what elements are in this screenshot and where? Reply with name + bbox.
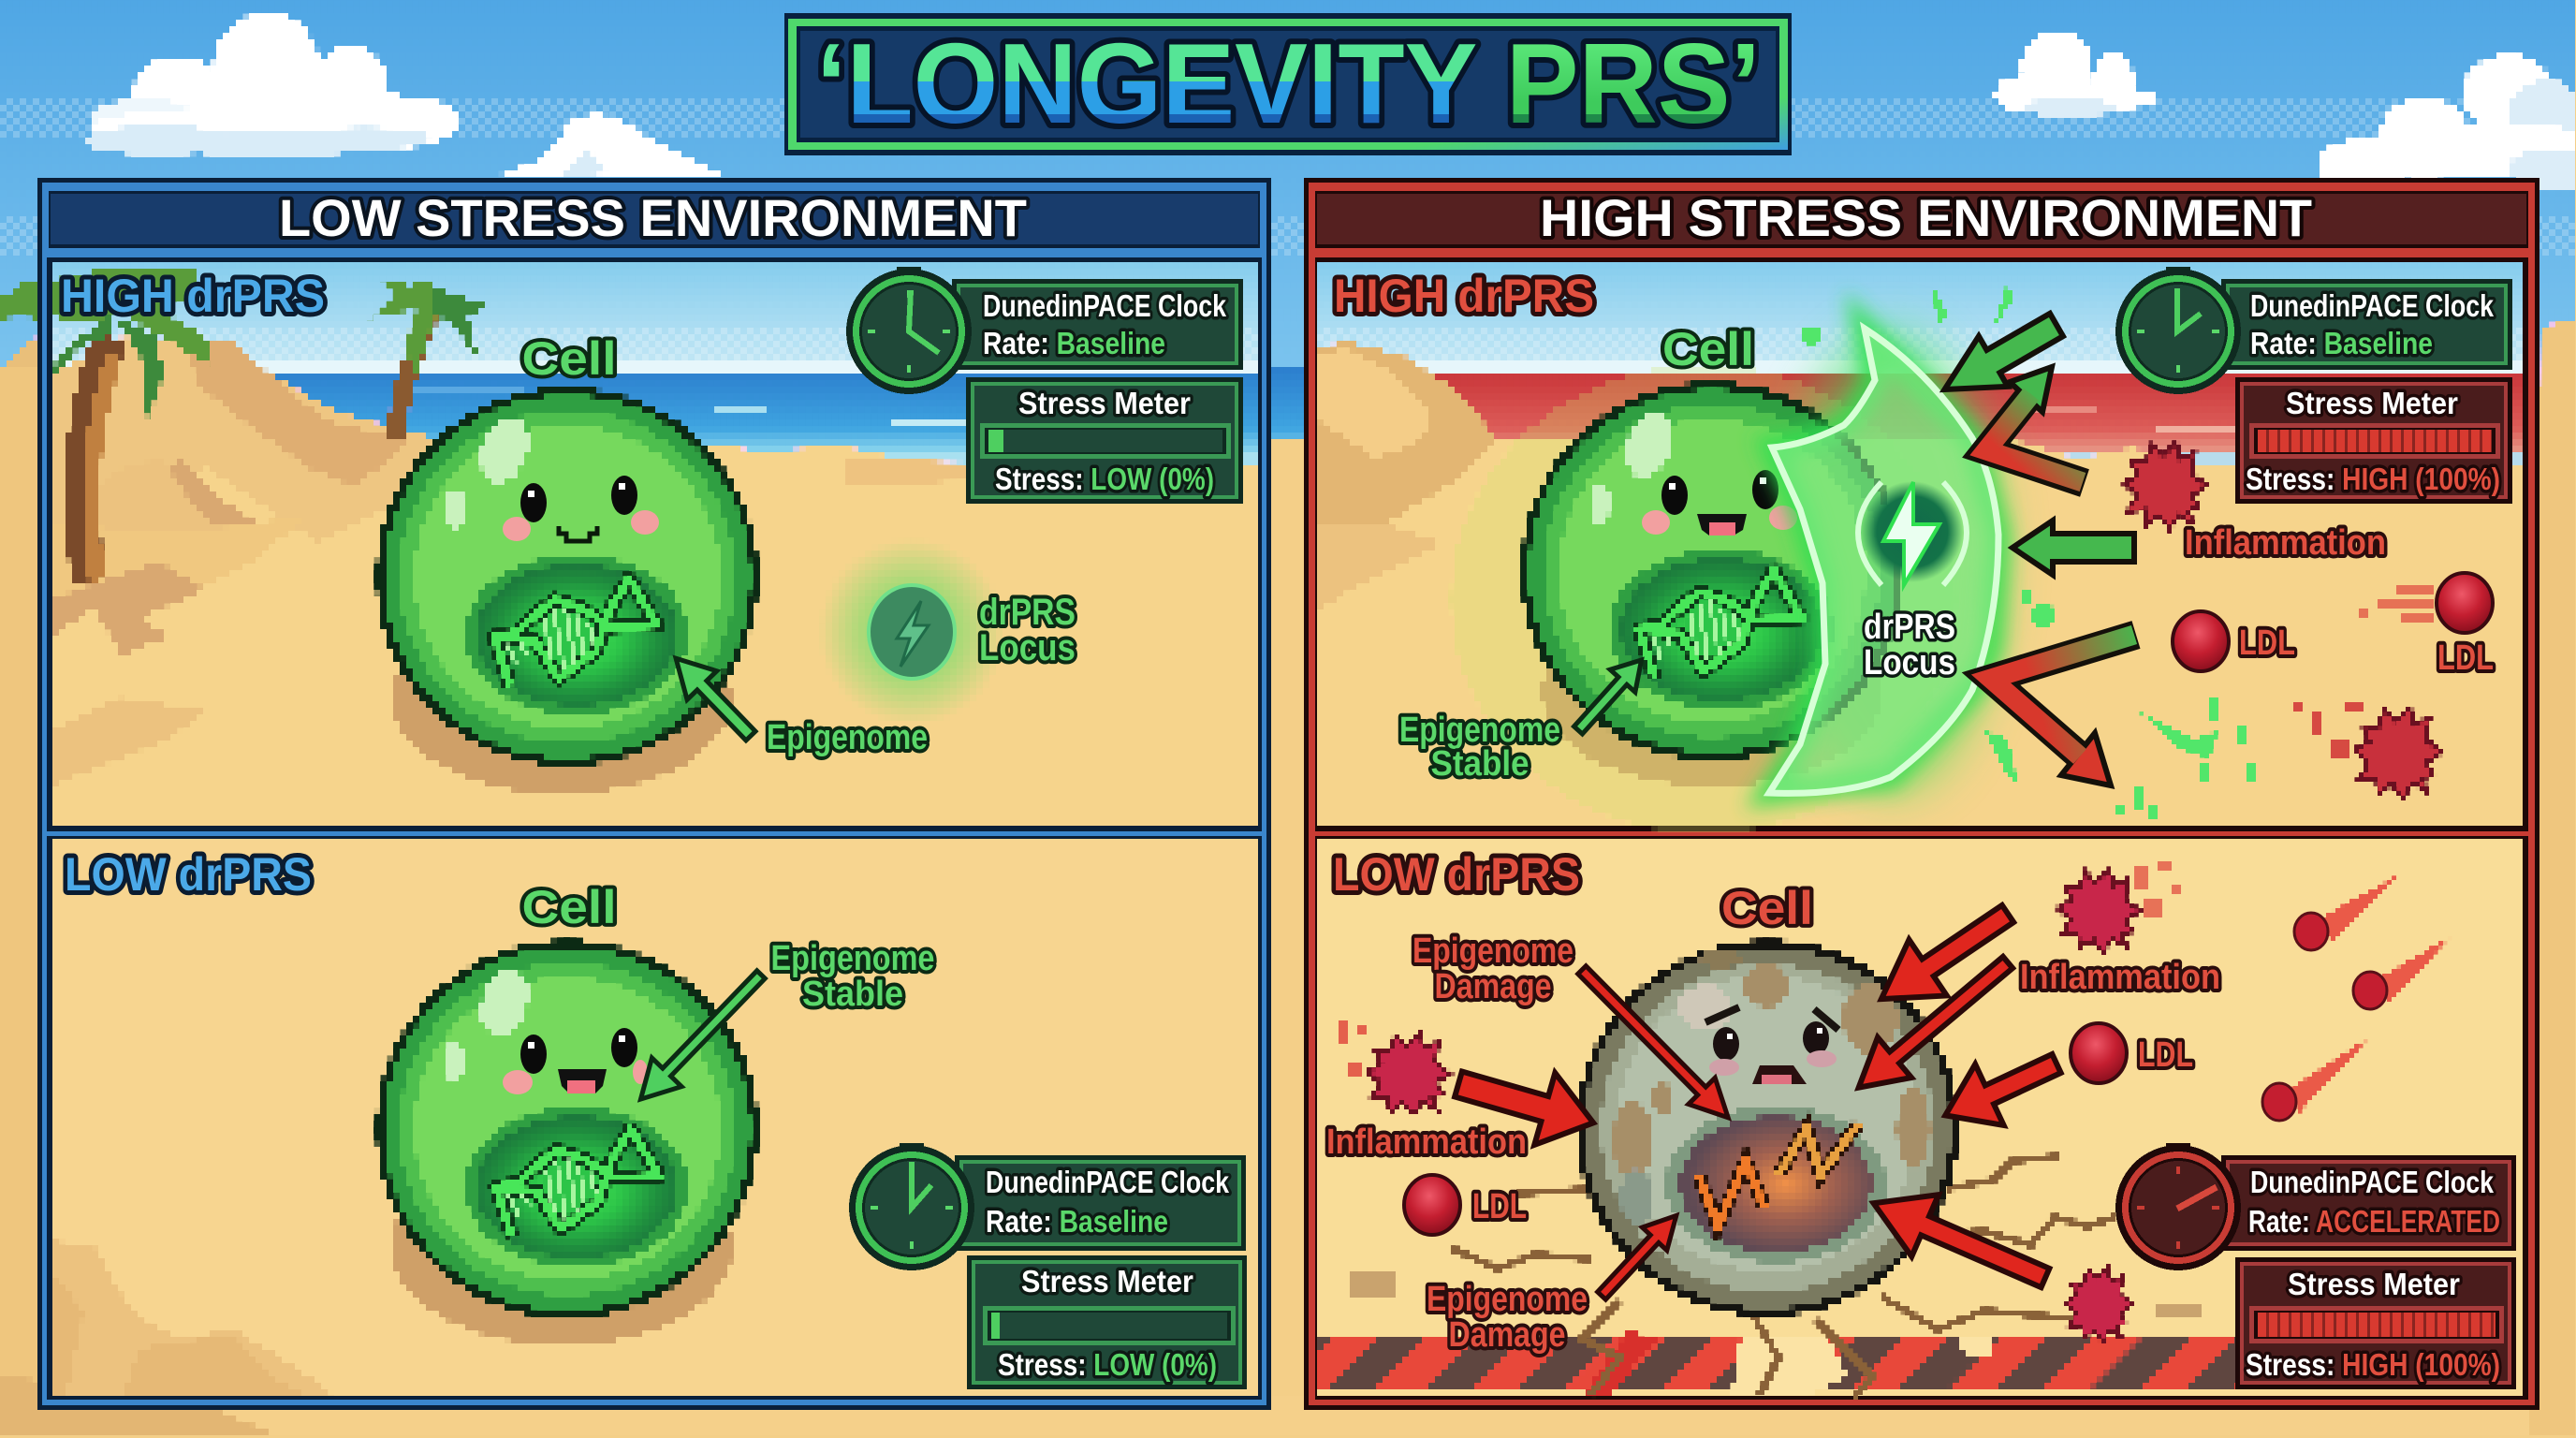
face (503, 1028, 648, 1094)
arrow: deflected green 2 (2012, 521, 2134, 575)
label: stable: Stable (802, 975, 903, 1014)
clock text: DunedinPACE Clock (2250, 288, 2495, 323)
cell: stable (376, 940, 758, 1318)
icon: LDL left (1404, 1175, 1460, 1235)
label: drPRS locus: drPRS (1864, 608, 1955, 647)
stress bar (980, 423, 1231, 459)
arrow: deflected green 1 (1930, 300, 2071, 415)
label: drPRS locus: drPRS (979, 592, 1076, 633)
scorched sand scene (1319, 840, 2525, 1397)
stress value: Stress: HIGH (100%) (2246, 1347, 2500, 1382)
sad face (1705, 1007, 1838, 1084)
arrow: inflammation to nucleus (1842, 943, 2025, 1108)
clock panel (955, 1155, 1246, 1251)
cell: healthy (376, 388, 758, 766)
stress panel (967, 1255, 1247, 1389)
HUD: clock and stress meter (846, 267, 1243, 504)
icon: LDL 1 (2173, 611, 2229, 671)
stress bar (983, 1306, 1236, 1345)
rate text: Rate: Baseline (2250, 326, 2433, 360)
DNA helix (494, 579, 657, 686)
arrow: epigenome stable (1566, 649, 1654, 741)
label: high drPRS: HIGH drPRS (61, 270, 325, 322)
arrow: bounced 2 (1991, 635, 2136, 785)
arrow: bottom right (1860, 1172, 2058, 1309)
icon: LDL right (2071, 1023, 2127, 1083)
cell: damaged (1576, 940, 1958, 1316)
label: damage bottom: Damage (1449, 1315, 1565, 1355)
beach scene (51, 261, 1258, 828)
label: high drPRS: HIGH drPRS (1334, 270, 1594, 322)
title banner (784, 13, 1792, 155)
clock text: DunedinPACE Clock (983, 288, 1227, 323)
label: cell: Cell (522, 332, 616, 385)
eyes and smile (503, 476, 659, 541)
arrow: epigenome damage top (1569, 957, 1741, 1131)
sand scene (51, 840, 1258, 1397)
shield: drPRS crescent (1769, 329, 1998, 793)
icon: virus bottom (2066, 1268, 2131, 1343)
stress text: Stress Meter (2288, 1267, 2460, 1301)
rate text: Rate: Baseline (986, 1204, 1168, 1239)
stress text: Stress Meter (1021, 1264, 1193, 1299)
arrow: bounced 1 (1986, 367, 2085, 483)
rate text: Rate: Baseline (983, 326, 1165, 360)
icon: virus 2 with trail (2293, 704, 2441, 798)
label: cell: Cell (1662, 323, 1754, 375)
HUD: clock and stress meter (2115, 267, 2512, 504)
icon: virus left (1340, 1020, 1450, 1115)
stress text: Stress Meter (2286, 386, 2458, 420)
green debris (1802, 281, 2256, 820)
sub-panel: low stress, high drPRS (51, 261, 1258, 828)
sub-panel: high stress, low drPRS (1319, 840, 2525, 1397)
DNA helix (496, 1129, 659, 1237)
label: LDL: LDL (2437, 638, 2494, 678)
stress panel (966, 377, 1243, 504)
stress panel (2235, 1257, 2516, 1389)
palm tree: right (370, 281, 485, 440)
HUD: clock and stress meter (2115, 1143, 2516, 1389)
arrow: inflammation top right (1863, 886, 2027, 1027)
cell body (376, 388, 758, 766)
label: LDL: LDL (2239, 624, 2295, 663)
red-sea beach scene (1319, 261, 2525, 833)
face (1642, 470, 1797, 536)
label: stable: Stable (1430, 744, 1530, 784)
cell body (1521, 382, 1903, 760)
label: LDL right: LDL (2138, 1035, 2193, 1075)
broken DNA (1699, 1123, 1858, 1226)
clock panel (2221, 279, 2512, 370)
clock text: DunedinPACE Clock (986, 1165, 1230, 1199)
damaged cell body (1576, 940, 1958, 1316)
HUD: clock and stress meter (849, 1143, 1247, 1389)
arrow: LDL right (1931, 1033, 2071, 1146)
stress bar (2249, 423, 2500, 459)
stress value: Stress: HIGH (100%) (2246, 462, 2500, 496)
clock panel (952, 279, 1243, 370)
locus glow (818, 538, 1005, 726)
label: cell: Cell (522, 881, 616, 933)
label: inflammation left: Inflammation (1326, 1123, 1527, 1162)
DNA helix (1639, 571, 1802, 679)
icon: clock (2115, 1143, 2241, 1270)
palm tree: left (51, 267, 213, 582)
label: epigenome damage top: Epigenome (1412, 932, 1573, 971)
arrow: inflammation left (1448, 1049, 1603, 1159)
arrow: to epigenome (626, 961, 776, 1113)
icon: LDL 2 with trail (2359, 573, 2493, 633)
label: inflammation right: Inflammation (2020, 958, 2220, 997)
label: LDL left: LDL (1472, 1187, 1527, 1226)
label: low drPRS: LOW drPRS (1333, 848, 1580, 901)
label: low drPRS: LOW drPRS (65, 848, 312, 901)
sub-panel: low stress, low drPRS (51, 840, 1258, 1397)
heading: low stress environment: LOW STRESS ENVIRONMENT (279, 188, 1027, 247)
cracks in ground (1451, 1156, 2115, 1397)
clock panel (2221, 1155, 2516, 1251)
label: inflammation: Inflammation (2185, 523, 2386, 563)
heading: high stress environment: HIGH STRESS ENVIRONMENT (1540, 188, 2312, 247)
green glow around shield (1778, 328, 2003, 796)
icon: dim drPRS locus (869, 585, 955, 679)
icon: meteor 1 (2294, 875, 2398, 950)
icon: virus top (2057, 859, 2181, 952)
arrow: epigenome damage bottom (1589, 1204, 1689, 1307)
clock text: DunedinPACE Clock (2250, 1165, 2495, 1199)
cell: protected (1521, 382, 1903, 760)
cell body (376, 940, 758, 1318)
rate text: Rate: ACCELERATED (2248, 1204, 2500, 1239)
label: epigenome: Epigenome (767, 718, 928, 757)
sub-panel: high stress, high drPRS (1319, 261, 2525, 833)
label: epigenome damage bottom: Epigenome (1427, 1280, 1588, 1319)
stress bar (2249, 1306, 2504, 1343)
stress text: Stress Meter (1018, 386, 1191, 420)
stress panel (2235, 377, 2512, 504)
stress value: Stress: LOW (0%) (995, 462, 1214, 496)
label: damage top: Damage (1434, 967, 1552, 1006)
panel: low stress environment (37, 178, 1271, 1410)
label: cell: Cell (1721, 882, 1813, 934)
title text: ‘LONGEVITY PRS’ (816, 20, 1761, 147)
icon: clock (846, 267, 972, 394)
icon: clock (849, 1143, 974, 1270)
label: locus: Locus (1864, 643, 1955, 682)
stress value: Stress: LOW (0%) (998, 1347, 1217, 1382)
icon: meteor 2 (2353, 935, 2452, 1009)
icon: meteor 3 (2262, 1036, 2370, 1121)
label: epigenome stable: Epigenome (771, 939, 934, 978)
icon: drPRS lightning (1858, 481, 1967, 585)
arrow: to epigenome (661, 644, 766, 750)
panel: high stress environment (1304, 178, 2539, 1410)
label: epigenome stable: Epigenome (1399, 711, 1560, 750)
icon: inflammation virus (2124, 443, 2206, 529)
label: locus: Locus (979, 627, 1076, 668)
icon: clock (2115, 267, 2241, 394)
